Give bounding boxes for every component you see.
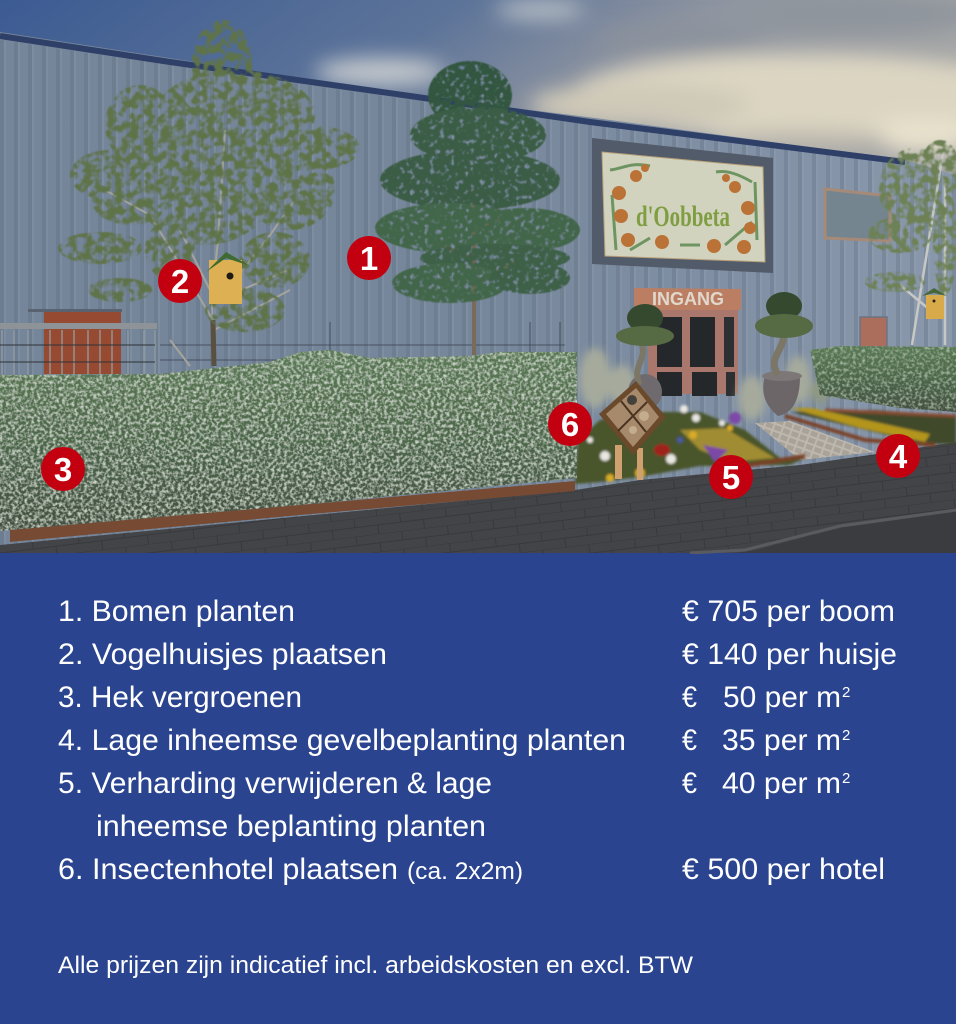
- marker 3: 3: [54, 451, 72, 488]
- marker 6: 6: [561, 406, 579, 443]
- item prices: € 500 per hotel: [682, 853, 885, 886]
- hedge left: green fence: [0, 350, 577, 531]
- item names: (ca. 2x2m): [407, 858, 523, 885]
- railing and fence: [0, 322, 565, 375]
- item prices: 2: [842, 684, 850, 701]
- item prices: € 705 per boom: [682, 595, 895, 628]
- item prices: €: [682, 767, 697, 800]
- ground: pavement: [0, 442, 956, 553]
- ornamental grasses: [579, 348, 830, 420]
- marker 6: [548, 402, 592, 446]
- bird house on left tree: [206, 252, 250, 304]
- flower bed with wildflowers: [575, 405, 805, 484]
- item names: inheemse beplanting planten: [96, 810, 486, 843]
- item prices: 50 per m: [723, 681, 841, 714]
- entrance sign: [634, 288, 741, 310]
- red door right: [860, 317, 887, 347]
- marker 4: 4: [889, 438, 908, 475]
- hedge right: [810, 346, 956, 412]
- item prices: €: [682, 681, 697, 714]
- upper window: [825, 189, 890, 241]
- marker 1: 1: [360, 240, 378, 277]
- item names: 5. Verharding verwijderen & lage: [58, 767, 492, 800]
- entrance sign: INGANG: [652, 289, 724, 309]
- marker 5: [709, 455, 753, 499]
- tree: pine: [375, 61, 580, 355]
- item prices: 40 per m: [722, 767, 841, 800]
- marker 1: [347, 236, 391, 280]
- item prices: €: [682, 724, 697, 757]
- left red door: [28, 309, 122, 374]
- tree: leafy tree left: [58, 20, 360, 366]
- panel: price list: [58, 595, 897, 979]
- item names: 1. Bomen planten: [58, 595, 295, 628]
- hedge edging left: [10, 481, 575, 542]
- sign lettering: d'Oobbeta: [636, 200, 730, 233]
- bird house on right tree: [922, 288, 947, 319]
- marker 3: [41, 447, 85, 491]
- item names: 4. Lage inheemse gevelbeplanting planten: [58, 724, 626, 757]
- photo scene: building with greenery: [0, 0, 956, 554]
- marker 4: [876, 434, 920, 478]
- bonsai tree left with pot: [616, 304, 674, 410]
- sky with clouds: [0, 0, 956, 200]
- item names: 2. Vogelhuisjes plaatsen: [58, 638, 387, 671]
- marker 5: 5: [722, 459, 740, 496]
- building wall: [0, 32, 956, 553]
- sign with embroidered flowers: [592, 138, 773, 273]
- item names: 6. Insectenhotel plaatsen: [58, 853, 398, 886]
- item prices: € 140 per huisje: [682, 638, 897, 671]
- item prices: [682, 595, 897, 886]
- marker 2: [158, 259, 202, 303]
- entrance doors: [648, 309, 738, 396]
- insect hotel: [599, 381, 666, 480]
- bonsai tree right with pot: [755, 292, 813, 416]
- tree: birch right: [865, 140, 956, 345]
- item prices: 2: [842, 770, 850, 787]
- footnote: Alle prijzen zijn indicatief incl. arbeidskosten en excl. BTW: [58, 952, 693, 979]
- marker 2: 2: [171, 263, 189, 300]
- item prices: 35 per m: [722, 724, 841, 757]
- planting bed right with yellow flowers: [785, 408, 956, 445]
- item names: 3. Hek vergroenen: [58, 681, 302, 714]
- paved path: [755, 421, 875, 460]
- item prices: 2: [842, 727, 850, 744]
- item names: [58, 595, 626, 886]
